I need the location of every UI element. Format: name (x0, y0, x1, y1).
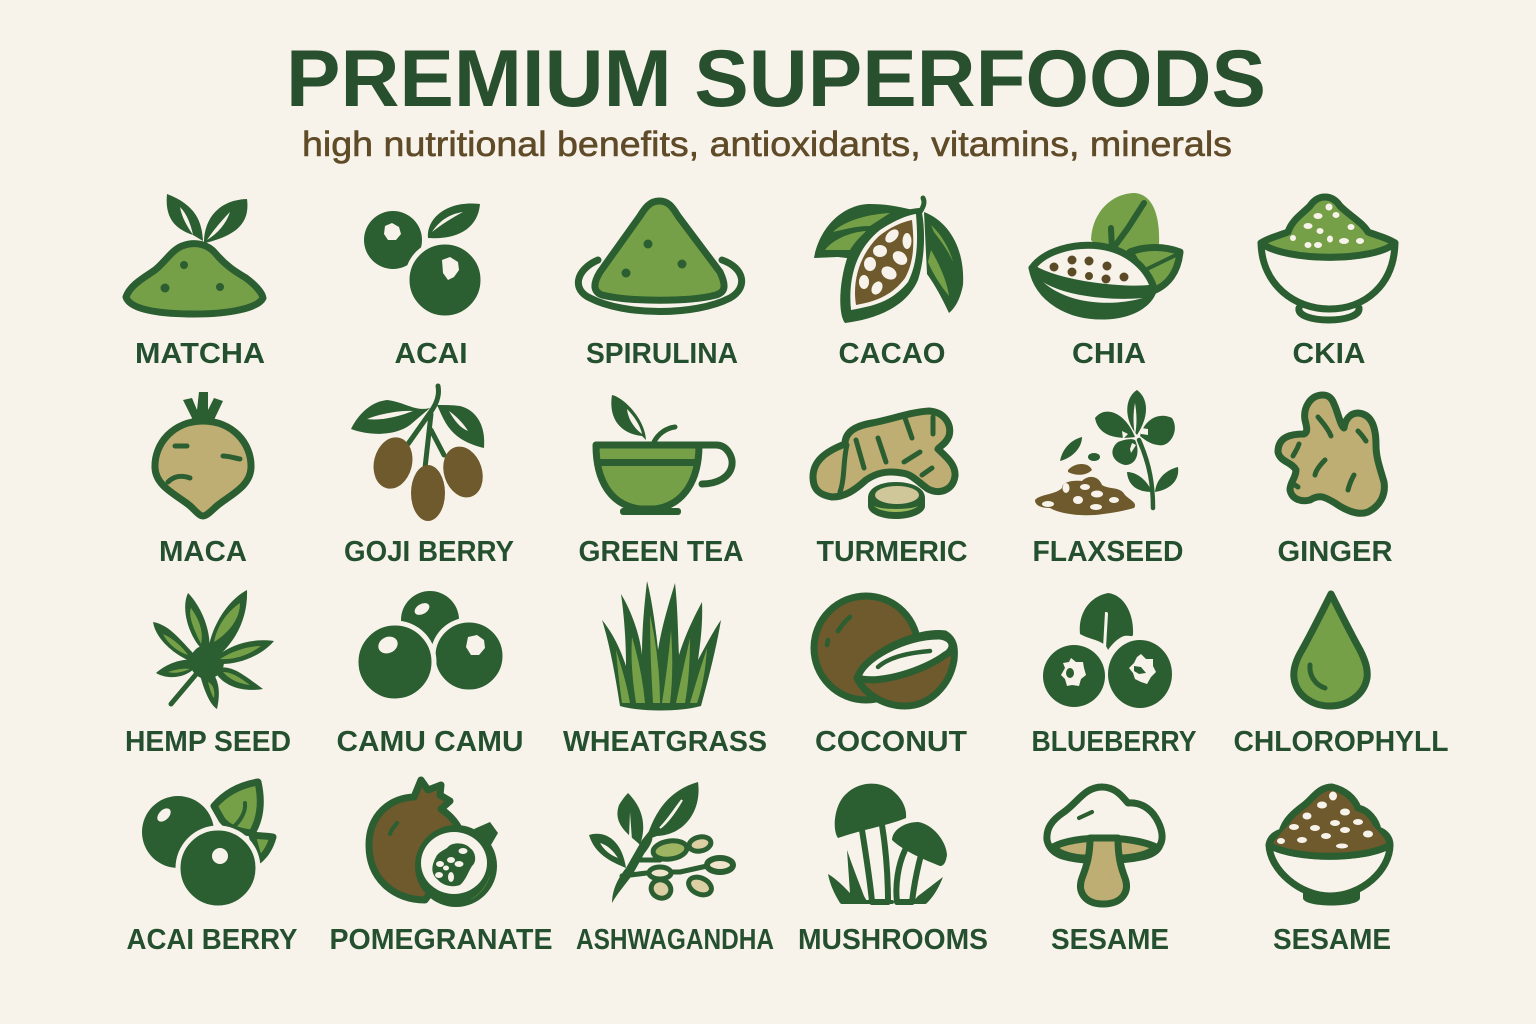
label: goji berry: GOJI BERRY (344, 536, 514, 568)
icon: maca root (155, 392, 251, 516)
label: pomegranate: POMEGRANATE (330, 924, 552, 956)
icon: ginger (1278, 395, 1384, 513)
label: coconut: COCONUT (815, 726, 967, 758)
label: sesame mushroom: SESAME (1051, 924, 1169, 956)
icon: green tea (596, 395, 732, 515)
subtitle: high nutritional benefits, antioxidants, vitamins, minerals (302, 125, 1232, 164)
icon: acai berry (142, 782, 273, 908)
icon: hemp leaf (153, 590, 274, 709)
icon: sesame mushroom (1047, 787, 1162, 904)
icon: chia (1032, 193, 1180, 316)
icon: coconut (814, 596, 954, 706)
label: spirulina: SPIRULINA (586, 338, 738, 370)
icon: sesame bowl (1269, 787, 1390, 906)
icon: turmeric (813, 411, 955, 519)
label: cacao: CACAO (838, 338, 946, 370)
label: acai: ACAI (394, 338, 468, 370)
label: turmeric: TURMERIC (816, 536, 968, 568)
label: chia: CHIA (1072, 338, 1146, 370)
icon: goji berry (351, 386, 489, 521)
icon: flaxseed (1035, 390, 1178, 515)
icon: ashwagandha (589, 782, 733, 903)
label: ginger: GINGER (1278, 536, 1393, 568)
icon: chlorophyll drop (1294, 594, 1367, 706)
icon: blueberry (1043, 593, 1172, 708)
label: green tea: GREEN TEA (578, 536, 744, 568)
icon: ckia bowl (1261, 197, 1395, 320)
icon: mushrooms (828, 784, 947, 903)
label: mushrooms: MUSHROOMS (798, 924, 988, 956)
label: matcha: MATCHA (135, 338, 265, 370)
title: PREMIUM SUPERFOODS (286, 34, 1266, 124)
label: blueberry: BLUEBERRY (1032, 726, 1196, 758)
icon: camu camu (356, 591, 505, 701)
icon: cacao (814, 198, 963, 323)
label: hemp seed: HEMP SEED (125, 726, 291, 758)
label: ashwagandha: ASHWAGANDHA (576, 924, 774, 956)
label: wheatgrass: WHEATGRASS (563, 726, 767, 758)
label: ckia: CKIA (1292, 338, 1366, 370)
label: chlorophyll: CHLOROPHYLL (1234, 726, 1448, 758)
label: acai berry: ACAI BERRY (126, 924, 298, 956)
icon: matcha (126, 194, 263, 314)
icon: pomegranate (369, 780, 498, 907)
label: camu camu: CAMU CAMU (336, 726, 524, 758)
icon: wheatgrass (602, 581, 721, 710)
label: flaxseed: FLAXSEED (1032, 536, 1184, 568)
label: maca: MACA (159, 536, 247, 568)
icon: spirulina (578, 201, 742, 312)
label: sesame bowl: SESAME (1273, 924, 1391, 956)
icon: acai (364, 203, 483, 318)
